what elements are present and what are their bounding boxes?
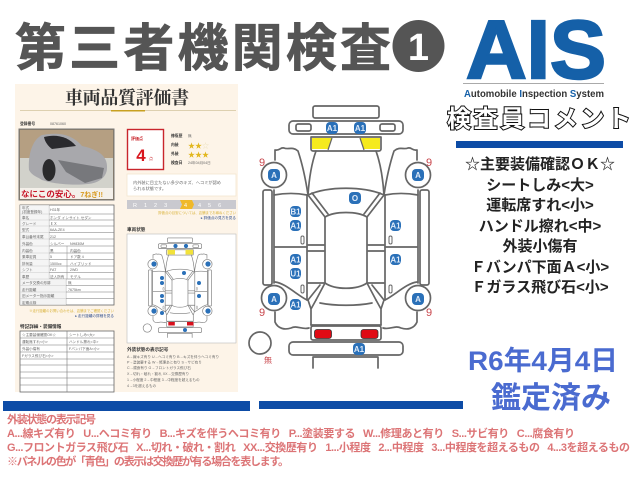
vehicle table: モデル: [70, 274, 81, 279]
score details: 24年04月04日: [188, 160, 211, 165]
vehicle table: 黒: [50, 249, 54, 253]
footer legend: [7, 412, 630, 468]
legend: exterior symbols: C→腐食有り G→フロントガラス飛び石: [127, 365, 191, 370]
damage badges: B1: [290, 208, 301, 216]
legend: exterior symbols: A→線キズ有り U→ヘコミ有り B→キズを伴うヘコミ有り: [127, 354, 219, 359]
damage badges: A: [415, 171, 421, 180]
red nine marks: 9: [259, 157, 265, 169]
vehicle table: 車名: [22, 215, 30, 220]
vehicle table: 外装色: [22, 241, 33, 246]
icon: number one: 1: [408, 27, 429, 69]
comment list: Ｆバンパ下面Ａ<小>: [471, 259, 609, 276]
damage badges: A: [271, 295, 277, 304]
vehicle table: 212: [50, 235, 56, 239]
comment box: 内外装に目立たない多少のキズ、ヘコミが認め: [133, 179, 221, 186]
panel: quality report: [15, 84, 238, 392]
mini vehicle diagram: [127, 234, 236, 343]
damage badges: O: [352, 194, 358, 203]
footer legend: 外装状態の表示記号: [7, 412, 96, 426]
yellow panels: [312, 138, 332, 149]
legend: exterior symbols: 外装状態の表示記号: [127, 346, 169, 353]
comment box: られる状態です。: [133, 185, 166, 192]
score details: [171, 133, 211, 165]
vehicle table: メータ交換の形跡: [22, 280, 51, 285]
damage badges: A1: [290, 300, 301, 310]
damage badges: A1: [354, 345, 365, 354]
equipment table: 外装小傷有: [22, 346, 40, 351]
damage badges: A: [271, 171, 277, 180]
score details: ★★★: [188, 151, 209, 159]
vehicle table: 乗車定員: [22, 254, 37, 259]
vehicle table: 法人所有: [50, 274, 65, 279]
divider bar: comment: [456, 141, 623, 148]
photo: silver car: なにこの安心。7ねぎ!!: [21, 189, 103, 199]
vehicle table: 車歴: [22, 274, 30, 279]
vehicle table: グレード: [22, 221, 37, 226]
inspection date: 鑑定済み: [491, 382, 611, 415]
equipment table: Fガラス飛び石<小>: [22, 353, 53, 358]
red nine marks: 9: [426, 307, 432, 319]
equipment table: シートしみ<大>: [69, 332, 95, 337]
vehicle table: シフト: [22, 267, 33, 272]
panel: quality report: 08761060: [50, 122, 66, 126]
vehicle table: 定期点検: [22, 300, 37, 305]
damage badges: [268, 122, 424, 355]
score box: 点: [149, 155, 153, 161]
divider bar: left: [3, 401, 250, 411]
equipment table: Fバンパ下面A<小>: [69, 346, 100, 351]
score details: ★★☆: [188, 141, 209, 150]
damage badges: U1: [290, 270, 301, 278]
legend: exterior symbols: X→切れ・破れ・割れ XX→交換歴有り: [127, 371, 189, 376]
grade scale: 4: [184, 203, 187, 209]
vehicle table: 7675km: [68, 288, 81, 292]
comment box: [127, 174, 236, 196]
footer legend: ※パネルの色が「青色」の表示は交換歴が有る場合を表します。: [7, 454, 289, 468]
vehicle table: 排気量: [22, 261, 33, 266]
vehicle table: 旧メーター指示距離: [22, 293, 55, 298]
vehicle table: FAT: [50, 268, 57, 272]
red nine marks: [259, 157, 432, 365]
comment list: 外装小傷有: [502, 237, 578, 255]
vehicle table: 内装色: [70, 248, 81, 253]
title: 第三者機関検査: [15, 20, 391, 77]
grade scale: 456: [198, 203, 228, 209]
icon: number one: [392, 20, 444, 72]
red lights: [314, 330, 332, 338]
comment list: [465, 155, 615, 296]
vehicle table: [20, 205, 114, 305]
score box: 4: [136, 146, 146, 165]
vehicle table: 1500cc: [50, 262, 62, 266]
damage badges: A1: [290, 256, 301, 264]
inspection date: [468, 346, 618, 415]
comment list: シートしみ<大>: [486, 176, 594, 194]
vehicle table: 無: [68, 280, 72, 285]
divider bar: right: [259, 401, 463, 409]
damage badges: A1: [390, 256, 401, 264]
heading: vehicle condition: 車両状態: [127, 226, 146, 233]
legend: exterior symbols: 1→小程度 2→中程度 3→中程度を超えるもの: [127, 377, 200, 382]
photo: silver car: [19, 129, 114, 200]
table note: ※走行距離のお問い合わせは、店舗までご確認ください: [29, 308, 115, 313]
comment list: ☆主要装備確認ＯＫ☆: [465, 155, 615, 173]
vehicle table: 型式: [22, 227, 30, 232]
vehicle table: 年式: [22, 205, 30, 210]
grade scale: R123: [133, 203, 174, 209]
large vehicle diagram: [249, 106, 432, 368]
score box: [128, 130, 164, 170]
vehicle table: H31年: [50, 207, 61, 212]
comment list: ハンドル擦れ<中>: [479, 217, 601, 235]
legend: exterior symbols: [127, 346, 219, 388]
vehicle table: NH830M: [70, 242, 84, 246]
score details: 外装: [171, 151, 179, 156]
vehicle table: 内装色: [22, 248, 33, 253]
score details: 検査日: [171, 160, 183, 165]
vehicle table: 走行距離: [22, 287, 37, 292]
damage badges: A1: [390, 222, 401, 230]
registration number: 登録番号: [20, 121, 35, 126]
logo: AIS: AIS: [466, 3, 606, 96]
vehicle table: 6AA-ZE4: [50, 228, 65, 232]
red nine marks: 無: [264, 355, 272, 365]
red nine marks: 9: [259, 307, 265, 319]
vehicle table: ホンダ インサイト セダン: [50, 215, 92, 220]
damage badges: A1: [290, 222, 301, 230]
score box: 評価点: [131, 135, 143, 141]
panel: quality report: ▸ 評価点の見方を見る: [201, 215, 236, 220]
footer legend: G...フロントガラス飛び石 X...切れ・破れ・割れ XX...交換歴有り 1...小程度 2...中程度 3...中程度を超えるもの 4...3を超えるもの: [7, 440, 630, 454]
score details: 修復歴: [171, 133, 183, 138]
vehicle table: シルバー: [50, 242, 65, 246]
equipment table: ☆主要装備確認OK☆: [22, 332, 56, 337]
vehicle table: ハイブリッド: [70, 261, 92, 266]
vehicle table: 2WD: [70, 268, 78, 272]
red nine marks: 9: [426, 157, 432, 169]
footer legend: A...線キズ有り U...ヘコミ有り B...キズを伴うヘコミ有り P...塗装要する W...修理あと有り S...サビ有り C...腐食有り: [7, 426, 575, 440]
grade scale: [127, 200, 236, 209]
grade note: 評価点の目安については、店舗までお尋ねください: [158, 210, 237, 215]
damage badges: A1: [355, 124, 366, 133]
damage badges: A1: [327, 124, 338, 133]
panel: quality report: ▸ 走行距離の詳細を見る: [75, 313, 114, 318]
vehicle table: (初度登録年): [22, 209, 42, 214]
vehicle table: ＥＸ: [50, 222, 57, 226]
legend: exterior symbols: P→塗装要する W→修理あと有り S→サビ有り: [127, 360, 202, 364]
heading: special notes: 特記詳細・装備情報: [20, 323, 62, 330]
inspection date: R6年4月4日: [468, 346, 618, 376]
vehicle table: 車台番号末尾: [22, 234, 44, 239]
logo: AIS: Automobile Inspection System: [464, 88, 604, 100]
comment list: 運転席すれ<小>: [486, 196, 594, 214]
score details: 無: [188, 133, 192, 138]
vehicle table: ドア数 4: [70, 254, 84, 259]
heading: inspector comment: 検査員コメント: [447, 106, 631, 133]
equipment table: ハンドル擦れ<中>: [69, 339, 98, 344]
damage badges: A: [415, 295, 421, 304]
equipment table: [20, 331, 114, 392]
report heading: 車両品質評価書: [65, 84, 189, 110]
comment list: Ｆガラス飛び石<小>: [471, 279, 609, 296]
vehicle table: 5: [50, 255, 52, 259]
score details: 内装: [171, 142, 179, 147]
equipment table: 運転席すれ<小>: [22, 339, 48, 344]
legend: exterior symbols: 4→3を超えるもの: [127, 383, 156, 388]
